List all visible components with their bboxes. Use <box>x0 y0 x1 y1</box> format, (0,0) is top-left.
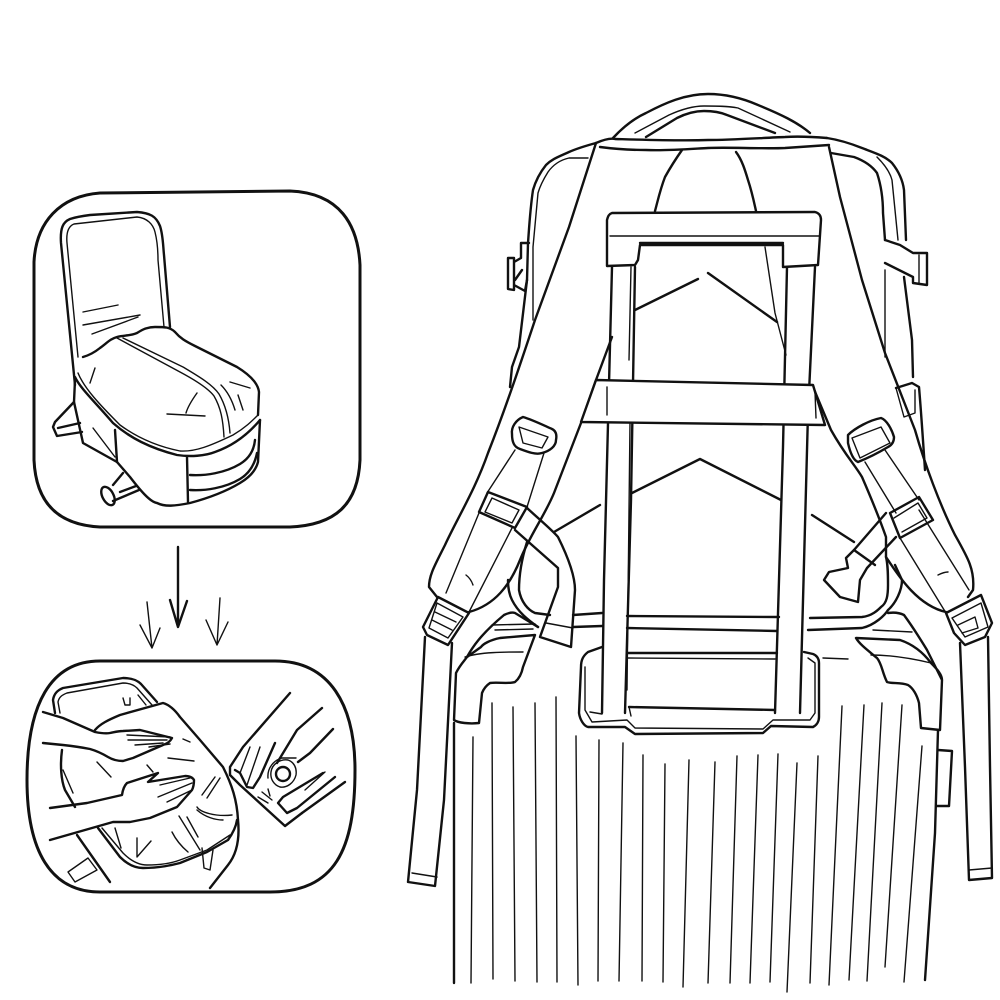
lower hand <box>50 773 194 840</box>
right shell <box>827 138 906 240</box>
top carry handle <box>613 94 810 138</box>
main illustration: backpack mounted on suitcase <box>408 94 992 992</box>
shoulder strap left <box>408 143 612 886</box>
valve ring <box>268 758 296 787</box>
side tab <box>937 750 952 806</box>
shoulder strap right <box>813 147 992 880</box>
cross strap over trolley <box>581 380 825 425</box>
strap slider left <box>479 492 527 528</box>
strap slider right <box>890 497 933 538</box>
backpack lid frame <box>53 678 157 713</box>
left shell <box>510 143 596 387</box>
chevrons <box>635 273 777 322</box>
left arrow <box>140 602 160 648</box>
lower strap end right <box>960 637 992 880</box>
right side pocket bump <box>896 383 925 470</box>
pull tab right <box>824 513 896 602</box>
upper arcs <box>655 150 756 211</box>
panel: hands compressing and pouch valve <box>27 661 355 892</box>
right arrow <box>206 598 228 645</box>
lower strap end left <box>408 637 452 886</box>
hand on compression valve pouch <box>230 693 345 826</box>
trolley base pad <box>579 647 848 734</box>
hanging strap tail <box>515 508 575 647</box>
suitcase ribs <box>471 697 922 992</box>
trolley handle and rails <box>602 212 821 713</box>
open lid <box>61 212 170 385</box>
panel frame <box>27 661 355 892</box>
side handle <box>53 402 82 436</box>
left corner guard <box>454 613 538 723</box>
top edge <box>596 137 827 143</box>
wheel <box>98 473 139 507</box>
backpack body <box>508 94 925 631</box>
D-ring left <box>512 417 556 454</box>
lower body seam <box>508 580 538 627</box>
compression cloth <box>61 703 239 888</box>
suitcase <box>454 613 952 992</box>
right corner guard <box>856 613 942 730</box>
lower tri-glide left <box>423 597 469 645</box>
suitcase edges <box>454 723 938 983</box>
side compression buckle right <box>885 240 927 285</box>
centre arrow <box>170 547 187 627</box>
panel: open backpack packed with clothes <box>34 191 360 527</box>
lower shell and pockets <box>74 373 260 506</box>
panel frame <box>34 191 360 527</box>
lower tri-glide right <box>946 595 992 645</box>
arrows pointing down <box>140 547 228 648</box>
packed clothes dome <box>83 327 259 437</box>
zip seam and lower bag <box>68 820 237 882</box>
side compression buckle left <box>508 243 529 291</box>
upper hand <box>43 712 172 761</box>
D-ring right <box>848 418 894 462</box>
